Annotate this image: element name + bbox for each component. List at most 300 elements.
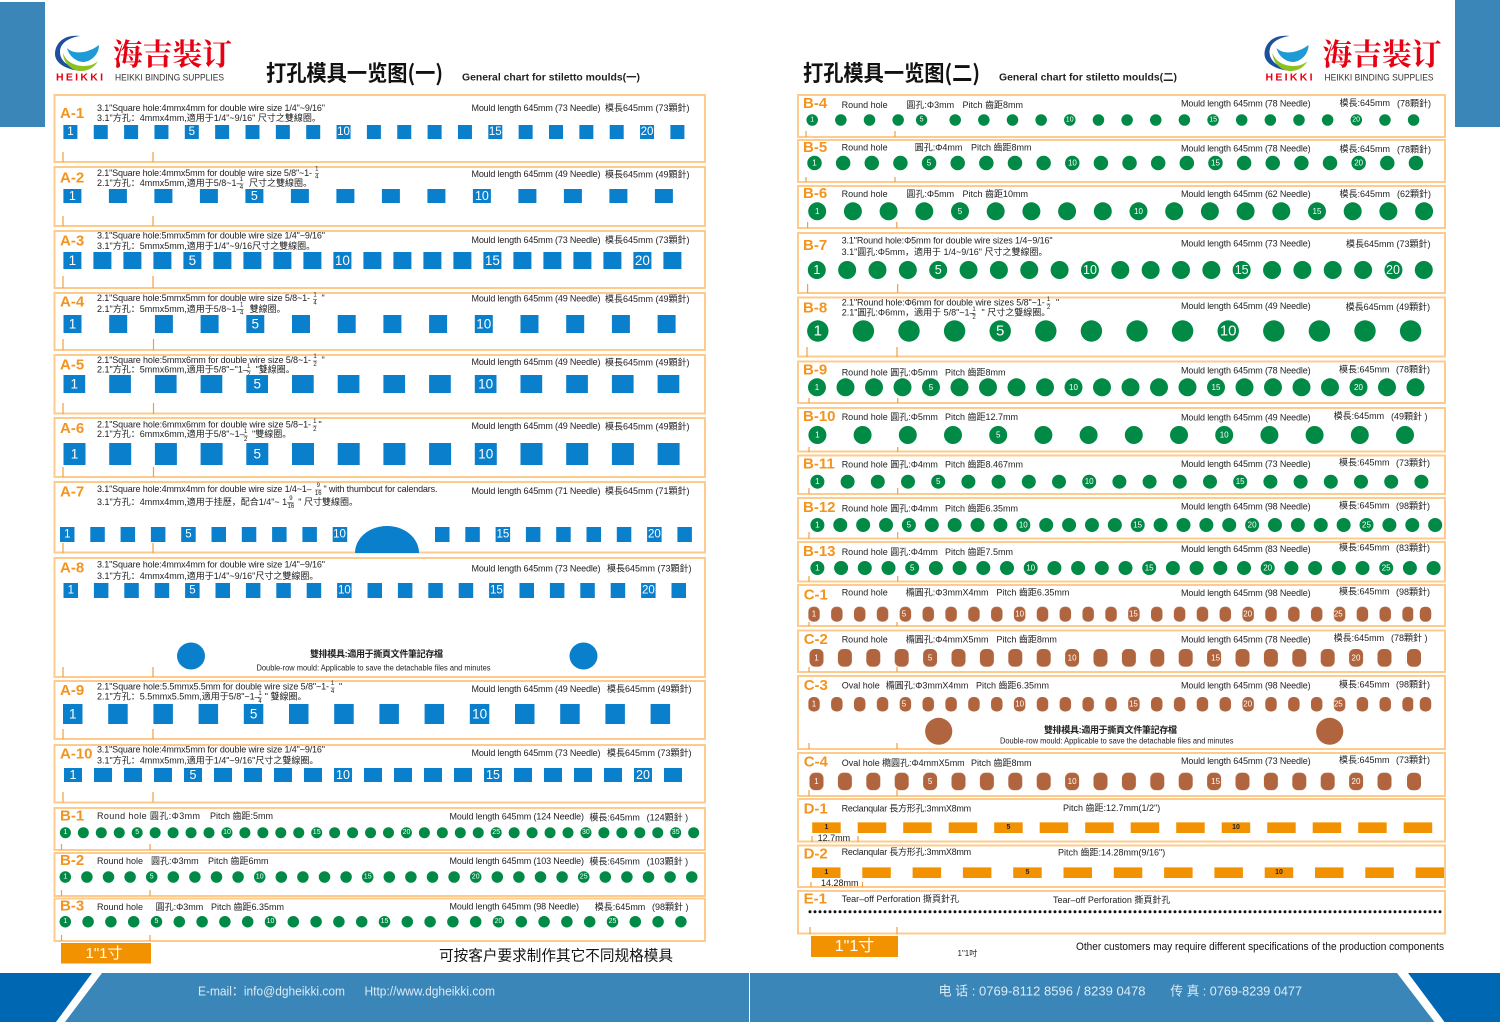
panel: B-10: 5 bbox=[996, 430, 1001, 440]
panel: A-6: 5 bbox=[254, 446, 261, 462]
panel: B-3: 20 bbox=[495, 918, 502, 925]
panel: A-8: 3.1"Square hole:4mmx4mm for double wire size 1/4"~9/16" bbox=[97, 560, 325, 570]
panel: A-9: 10 bbox=[472, 706, 487, 722]
panel: B-9: Round hole 圓孔:Φ5mm bbox=[842, 368, 938, 378]
panel: A-9: A-9 bbox=[60, 682, 84, 699]
panel: A-7: 模長645mm (71顆針) bbox=[605, 485, 690, 496]
double-row note: Double-row mould: Applicable to save the detachable files and minutes bbox=[256, 664, 490, 672]
panel: C-4: Mould length 645mm (73 Needle) bbox=[1181, 756, 1311, 766]
footer: right: 传 真 : 0769-8239 0477 bbox=[1170, 984, 1302, 998]
panel: B-8: 模長645mm (49顆針) bbox=[1346, 301, 1430, 312]
panel: C-4: 20 bbox=[1352, 777, 1361, 786]
panel: B-7: 1 bbox=[813, 263, 820, 277]
panel: C-1: 橢圓孔:Φ3mmX4mm bbox=[906, 587, 988, 598]
panel: B-5: 10 bbox=[1068, 158, 1077, 168]
panel: B-1: 35 bbox=[672, 829, 680, 836]
panel: B-4: Round hole bbox=[842, 100, 888, 110]
panel: B-3: Round hole bbox=[97, 902, 143, 912]
panel: A-8: 3.1"方孔：4mmx4mm,適用于1/4"~9/16"尺寸之雙線圈。 bbox=[97, 570, 318, 581]
panel: B-8: 1 bbox=[972, 307, 976, 313]
panel: B-1: Mould length 645mm (124 Needle) bbox=[450, 812, 584, 822]
panel: B-5: 15 bbox=[1211, 158, 1220, 168]
panel: B-4: (78顆針) bbox=[1397, 98, 1431, 108]
panel: B-7: 模長645mm (73顆針) bbox=[1346, 238, 1431, 249]
panel: B-2: 5 bbox=[150, 874, 154, 880]
panel: B-5: Mould length 645mm (78 Needle) bbox=[1181, 144, 1311, 154]
panel: A-2: 尺寸之雙線圈。 bbox=[249, 177, 312, 188]
panel: B-1: 15 bbox=[313, 829, 321, 836]
panel: B-9: B-9 bbox=[803, 362, 827, 378]
panel: B-12: 5 bbox=[907, 520, 912, 530]
panel: A-8: 模長645mm (73顆針) bbox=[607, 562, 692, 574]
panel: B-6: 1 bbox=[815, 207, 820, 216]
panel: A-7: A-7 bbox=[60, 484, 84, 500]
title: left: 打孔模具一览图(一) bbox=[266, 56, 443, 88]
panel: B-10: B-10 bbox=[803, 408, 836, 425]
panel: C-3: 橢圓孔:Φ3mmX4mm bbox=[886, 679, 968, 690]
panel: B-11: Pitch 齒距8.467mm bbox=[945, 459, 1023, 469]
panel: C-3: 模長:645mm bbox=[1339, 679, 1390, 689]
panel: A-10 bbox=[54, 744, 705, 802]
panel: C-4: 10 bbox=[1068, 777, 1077, 786]
panel: A-6 bbox=[54, 418, 705, 477]
panel: B-2: B-2 bbox=[60, 852, 84, 869]
footer: left bbox=[0, 973, 749, 1022]
panel: D-1: 5 bbox=[1007, 824, 1011, 831]
thumbcut half circle bbox=[355, 526, 419, 553]
panel: B-10 bbox=[798, 408, 1445, 452]
panel: A-7: " 尺寸雙線圈。 bbox=[298, 496, 358, 507]
panel: B-3: B-3 bbox=[60, 898, 84, 914]
panel: A-7 bbox=[54, 482, 705, 553]
panel: B-6: Pitch 齒距10mm bbox=[962, 189, 1028, 199]
panel: A-7: " with thumbcut for calendars. bbox=[324, 484, 438, 494]
panel: A-6: 10 bbox=[478, 446, 493, 462]
panel: B-3: 25 bbox=[609, 918, 616, 925]
panel: A-7: 1 bbox=[64, 528, 71, 540]
panel: D-1: 1 bbox=[825, 824, 829, 831]
panel: A-2: 1 bbox=[69, 189, 76, 203]
panel: A-9: 4 bbox=[258, 699, 262, 705]
panel: B-10: 模長:645mm bbox=[1334, 411, 1384, 421]
panel: B-3: Pitch 齒距6.35mm bbox=[211, 902, 284, 912]
panel: A-6: 模長645mm (49顆針) bbox=[605, 420, 690, 432]
title: right: 打孔模具一览图(二) bbox=[803, 56, 980, 88]
panel: B-11: Round hole 圓孔:Φ4mm bbox=[842, 459, 938, 469]
double-row note: Double-row mould: Applicable to save the detachable files and minutes bbox=[1000, 736, 1234, 746]
panel: D-1: Pitch 齒距:12.7mm(1/2") bbox=[1063, 803, 1160, 813]
panel: A-3: 15 bbox=[485, 253, 500, 268]
panel: C-2: 1 bbox=[814, 653, 819, 662]
panel: E-1: Tear–off Perforation 撕頁針孔 bbox=[1053, 894, 1170, 905]
panel: B-13: 20 bbox=[1263, 564, 1273, 572]
panel: B-1: 1 bbox=[63, 829, 67, 836]
panel: B-3: 10 bbox=[267, 918, 274, 925]
panel: B-1: 5 bbox=[135, 829, 139, 836]
panel: B-8: 2.1"Round hole:Φ6mm for double wire sizes 5/8"~1- bbox=[842, 298, 1045, 308]
panel: E-1: Tear–off Perforation 撕頁針孔 bbox=[842, 893, 959, 904]
panel: A-8 bbox=[54, 558, 705, 677]
panel: B-5: Round hole bbox=[842, 142, 888, 152]
panel: A-2: Mould length 645mm (49 Needle) bbox=[472, 169, 600, 179]
panel: A-9: 1 bbox=[69, 706, 77, 722]
panel: A-1: 5 bbox=[189, 126, 195, 138]
panel: A-7: Mould length 645mm (71 Needle) bbox=[472, 486, 600, 496]
panel: C-2: 模長:645mm bbox=[1334, 633, 1384, 643]
panel: B-9: 1 bbox=[815, 383, 820, 392]
panel: A-8: A-8 bbox=[60, 560, 84, 576]
panel: A-6: 1 bbox=[244, 429, 248, 435]
panel: A-5: 10 bbox=[478, 376, 493, 392]
panel: B-4: 10 bbox=[1066, 116, 1074, 124]
panel: B-11: 1 bbox=[815, 477, 820, 486]
panel: C-4: 橢圓孔:Φ4mmX5mm bbox=[882, 757, 965, 768]
panel: A-9: 4 bbox=[331, 689, 335, 695]
panel: B-12: B-12 bbox=[803, 499, 836, 516]
panel: C-3: C-3 bbox=[804, 677, 828, 694]
panel: B-11: Mould length 645mm (73 Needle) bbox=[1181, 459, 1311, 469]
panel: B-11: B-11 bbox=[803, 456, 835, 472]
panel: A-1: 1 bbox=[67, 126, 74, 138]
footer: right bbox=[750, 973, 1500, 1022]
panel: B-12: 1 bbox=[815, 520, 820, 530]
panel: C-3: 25 bbox=[1334, 700, 1343, 709]
subtitle: right: General chart for stiletto moulds(二) bbox=[999, 72, 1177, 84]
panel: C-4: (73顆針) bbox=[1396, 754, 1430, 765]
panel: B-11: 模長:645mm bbox=[1339, 458, 1390, 468]
panel: A-9: 模長645mm (49顆針) bbox=[607, 683, 692, 694]
panel: A-4: Mould length 645mm (49 Needle) bbox=[472, 294, 600, 304]
panel: C-3 bbox=[798, 676, 1445, 749]
panel: B-7: 3.1"Round hole:Φ5mm for double wire sizes 1/4~9/16" bbox=[842, 236, 1053, 246]
panel: B-4: 模長:645mm bbox=[1340, 98, 1390, 108]
panel: A-7: 16 bbox=[288, 504, 295, 510]
panel: A-2: 10 bbox=[475, 189, 489, 203]
panel: B-5 bbox=[798, 139, 1445, 182]
panel: B-1: B-1 bbox=[60, 808, 84, 824]
panel: D-2: Reclanqular 長方形孔:3mmX8mm bbox=[842, 846, 971, 857]
panel: A-3: Mould length 645mm (73 Needle) bbox=[472, 235, 600, 245]
panel: A-1: Mould length 645mm (73 Needle) bbox=[472, 103, 600, 113]
panel: B-1: 10 bbox=[223, 829, 231, 836]
panel: B-5: 20 bbox=[1354, 158, 1364, 168]
panel: B-4: 20 bbox=[1352, 116, 1360, 124]
panel: A-1: 3.1"Square hole:4mmx4mm for double wire size 1/4"~9/16" bbox=[97, 103, 325, 113]
panel: B-6: 15 bbox=[1313, 207, 1322, 216]
panel: A-3: 3.1"方孔：5mmx5mm,適用于1/4"~9/16尺寸之雙線圈。 bbox=[97, 240, 315, 251]
footer: left: E-mail：info@dgheikki.com bbox=[198, 984, 345, 998]
double-row note: 雙排模具:適用于撕頁文件筆記存檔 bbox=[310, 648, 443, 659]
panel: A-6: Mould length 645mm (49 Needle) bbox=[472, 421, 600, 431]
panel: C-3: 5 bbox=[902, 700, 907, 709]
panel: D-2: Pitch 齒距:14.28mm(9/16") bbox=[1058, 848, 1165, 858]
panel: D-2 bbox=[798, 846, 1445, 888]
panel: C-4 bbox=[798, 753, 1445, 796]
panel: C-2: 橢圓孔:Φ4mmX5mm bbox=[906, 634, 988, 645]
panel: B-2: 10 bbox=[256, 874, 264, 880]
panel: A-9: Mould length 645mm (49 Needle) bbox=[472, 684, 600, 694]
logo: left bbox=[55, 30, 232, 84]
panel: C-1: C-1 bbox=[804, 586, 828, 604]
panel: B-13: 1 bbox=[815, 564, 820, 572]
panel: A-3: 1 bbox=[69, 253, 76, 268]
panel: B-6: 5 bbox=[958, 207, 963, 216]
panel: A-6: "雙線圈。 bbox=[252, 428, 291, 439]
panel: B-1 bbox=[54, 808, 705, 850]
panel: B-7: 15 bbox=[1235, 263, 1249, 277]
logo: right: 海吉装订 bbox=[1322, 30, 1442, 74]
panel: A-3: 模長645mm (73顆針) bbox=[605, 234, 690, 245]
panel: B-5: 模長:645mm bbox=[1340, 144, 1390, 154]
panel: A-1: A-1 bbox=[60, 105, 84, 122]
panel: A-9: 1 bbox=[331, 681, 335, 687]
scale bar: left: 1"1寸 bbox=[85, 945, 123, 962]
logo: right bbox=[1264, 30, 1442, 84]
panel: B-6 bbox=[798, 185, 1445, 228]
panel: A-5: 1 bbox=[313, 354, 317, 360]
panel: C-3: 10 bbox=[1015, 700, 1025, 709]
panel: B-11: (73顆針) bbox=[1396, 457, 1430, 468]
panel: C-1: 模長:645mm bbox=[1339, 587, 1390, 597]
panel: A-6: 2 bbox=[313, 427, 317, 433]
panel: A-8: 15 bbox=[490, 584, 503, 596]
panel: B-5: 圓孔:Φ4mm bbox=[915, 142, 962, 152]
panel: A-10: 5 bbox=[190, 768, 197, 782]
panel: C-2: 5 bbox=[928, 653, 933, 662]
panel: B-11: 10 bbox=[1085, 477, 1094, 486]
panel: B-4: 1 bbox=[810, 116, 814, 124]
panel: B-5: (78顆針) bbox=[1397, 144, 1431, 154]
panel: A-5: 2 bbox=[313, 362, 317, 368]
panel: C-1: Mould length 645mm (98 Needle) bbox=[1181, 588, 1311, 598]
panel: A-2: A-2 bbox=[60, 170, 84, 186]
panel: A-7: 3.1"方孔：4mmx4mm,適用于挂歷，配合1/4"~ 1– bbox=[97, 496, 292, 507]
panel: B-3: 1 bbox=[63, 918, 67, 925]
panel: A-1 bbox=[54, 95, 705, 162]
panel: B-12: 10 bbox=[1019, 520, 1028, 530]
panel: B-9: 10 bbox=[1069, 383, 1078, 392]
panel: B-8: 2.1"圓孔:Φ6mm，適用于 5/8"~1– bbox=[842, 306, 975, 318]
panel: C-1: 5 bbox=[902, 610, 907, 619]
panel: A-5: 1 bbox=[71, 376, 78, 392]
panel: B-12: 25 bbox=[1362, 520, 1371, 530]
panel: C-2 bbox=[798, 630, 1445, 672]
panel: C-2: 10 bbox=[1068, 653, 1077, 662]
panel: A-8: 20 bbox=[642, 584, 655, 596]
panel: C-3: Oval hole bbox=[842, 680, 880, 690]
panel: C-3: 1 bbox=[812, 700, 817, 709]
panel: B-6: (62顆針) bbox=[1397, 188, 1431, 199]
panel: C-4: 模長:645mm bbox=[1339, 755, 1390, 765]
panel: B-3: 5 bbox=[155, 918, 159, 925]
panel: A-5: 1 bbox=[247, 364, 251, 370]
panel: B-1: Round hole 圓孔:Φ3mm bbox=[97, 811, 200, 821]
panel: A-6: A-6 bbox=[60, 420, 84, 437]
panel: B-2: 15 bbox=[364, 874, 372, 880]
logo: left: 海吉装订 bbox=[113, 30, 232, 74]
panel: B-3 bbox=[54, 898, 705, 941]
panel: B-10: 10 bbox=[1220, 430, 1229, 440]
panel: A-6: 2.1"方孔：6mmx6mm,適用于5/8"~1– bbox=[97, 428, 245, 439]
double-row circles bbox=[177, 642, 598, 670]
panel: B-2: Round hole bbox=[97, 856, 143, 866]
panel: B-11: 5 bbox=[936, 477, 941, 486]
panel: B-8: Mould length 645mm (49 Needle) bbox=[1181, 301, 1311, 311]
panel: B-12 bbox=[798, 498, 1445, 538]
panel: B-4: 圓孔:Φ3mm bbox=[906, 100, 954, 110]
panel: B-2: Pitch 齒距6mm bbox=[208, 856, 269, 866]
panel: A-2: 5 bbox=[251, 189, 258, 203]
logo: right: HEIKKI BINDING SUPPLIES bbox=[1324, 72, 1434, 82]
panel: B-7: 3.1"圓孔:Φ5mm，適用于 1/4~9/16" 尺寸之雙線圈。 bbox=[842, 246, 1047, 257]
panel: C-3: Mould length 645mm (98 Needle) bbox=[1181, 680, 1311, 690]
panel: B-9: (78顆針) bbox=[1396, 364, 1430, 374]
panel: B-2: 25 bbox=[580, 874, 588, 880]
panel: B-2: 1 bbox=[63, 874, 67, 880]
panel: B-4: 5 bbox=[920, 116, 924, 124]
panel: A-7: 20 bbox=[648, 528, 661, 540]
top-right blue block bbox=[1455, 0, 1500, 127]
panel: B-8: " 尺寸之雙線圈。 bbox=[982, 306, 1050, 318]
panel: C-1: 15 bbox=[1129, 610, 1138, 619]
panel: C-3: Pitch 齒距6.35mm bbox=[976, 680, 1049, 690]
double-row note bbox=[256, 648, 490, 672]
panel: B-6: Mould length 645mm (62 Needle) bbox=[1181, 189, 1311, 199]
panel: A-4 bbox=[54, 292, 705, 350]
panel: A-4: 1 bbox=[313, 292, 317, 298]
panel: A-10: 20 bbox=[636, 768, 650, 782]
subtitle: left: General chart for stiletto moulds(一) bbox=[462, 72, 640, 84]
panel: C-1: 20 bbox=[1243, 610, 1253, 619]
panel: B-2: 圓孔:Φ3mm bbox=[151, 856, 199, 866]
panel: B-8: B-8 bbox=[803, 300, 827, 316]
panel: A-4: 模長645mm (49顆針) bbox=[605, 293, 690, 304]
panel: B-4: 15 bbox=[1209, 116, 1217, 124]
footer: right: 电 话 : 0769-8112 8596 / 8239 0478 bbox=[938, 984, 1146, 998]
panel: B-5: 1 bbox=[812, 158, 817, 168]
panel: A-2: 4 bbox=[315, 174, 319, 180]
panel: A-2: 2.1"方孔：4mmx5mm,適用于5/8~1– bbox=[97, 177, 241, 188]
panel: A-7: 15 bbox=[497, 528, 509, 540]
panel: B-8: 5 bbox=[996, 322, 1004, 340]
panel: A-7: 16 bbox=[315, 491, 322, 497]
panel: B-13: 5 bbox=[910, 564, 915, 572]
panel: A-2: 模長645mm (49顆針) bbox=[605, 168, 690, 180]
panel: A-1: 15 bbox=[489, 126, 502, 138]
panel: B-10: Round hole 圓孔:Φ5mm bbox=[842, 412, 938, 422]
panel: B-10: Pitch 齒距12.7mm bbox=[945, 412, 1018, 422]
panel: C-4: Oval hole bbox=[842, 758, 880, 768]
panel: A-5: " bbox=[322, 355, 325, 365]
panel: A-10: 10 bbox=[336, 768, 350, 782]
panel: B-2 bbox=[54, 852, 705, 896]
panel: C-2: C-2 bbox=[804, 631, 828, 648]
panel: B-12: 20 bbox=[1248, 520, 1257, 530]
panel: B-8: 2 bbox=[1047, 305, 1051, 311]
note: left: 可按客户要求制作其它不同规格模具 bbox=[439, 944, 673, 966]
scale bar: right bbox=[811, 936, 898, 957]
panel: A-2: 1 bbox=[315, 166, 319, 172]
panel: A-4: 雙線圈。 bbox=[250, 303, 286, 314]
panel: A-5: 2 bbox=[247, 372, 251, 378]
panel: B-13: Round hole 圓孔:Φ4mm bbox=[842, 547, 938, 557]
panel: B-3: Mould length 645mm (98 Needle) bbox=[450, 902, 579, 912]
logo: left: HEIKKI bbox=[56, 72, 103, 84]
panel: A-10: 15 bbox=[486, 768, 500, 782]
panel: B-1: 模長:645mm bbox=[589, 812, 640, 822]
panel: B-3: 圓孔:Φ3mm bbox=[156, 902, 203, 912]
double-row note: 雙排模具:適用于撕頁文件筆記存檔 bbox=[1044, 724, 1177, 735]
panel: C-3: 20 bbox=[1243, 700, 1253, 709]
panel: A-4: 2.1"Square hole:5mmx5mm for double wire size 5/8~1- bbox=[97, 293, 310, 303]
panel: A-9: 5 bbox=[250, 706, 257, 722]
panel: A-9: " 雙線圈。 bbox=[265, 690, 307, 702]
panel: B-1: (124顆針 ) bbox=[647, 812, 688, 822]
panel: A-10: 3.1"Square hole:4mmx5mm for double wire size 1/4"~9/16" bbox=[97, 744, 325, 754]
panel: A-1: 10 bbox=[337, 126, 350, 138]
panel: B-12: 模長:645mm bbox=[1339, 501, 1390, 511]
panel: A-7: 10 bbox=[333, 528, 346, 540]
panel: A-6: 1 bbox=[71, 446, 78, 462]
panel: A-2: 4 bbox=[240, 185, 244, 191]
panel: B-13: 15 bbox=[1145, 564, 1154, 572]
panel: A-8: Mould length 645mm (73 Needle) bbox=[472, 564, 600, 574]
panel: B-9: 模長:645mm bbox=[1339, 364, 1390, 374]
panel: D-1: 10 bbox=[1232, 824, 1240, 831]
panel: B-3: 模長:645mm bbox=[595, 902, 645, 912]
panel: C-4: Pitch 齒距8mm bbox=[971, 758, 1032, 768]
panel: E-1 bbox=[798, 890, 1445, 934]
panel: B-2: (103顆針 ) bbox=[647, 856, 688, 866]
panel: C-1 bbox=[798, 585, 1445, 626]
panel: A-5: 模長645mm (49顆針) bbox=[605, 356, 690, 368]
panel: B-6: 圓孔:Φ5mm bbox=[906, 189, 954, 199]
panel: B-13: B-13 bbox=[803, 543, 836, 560]
panel: A-10: 3.1"方孔：4mmx5mm,適用于1/4"~9/16"尺寸之雙線圈。 bbox=[97, 754, 318, 766]
panel: B-12: Mould length 645mm (98 Needle) bbox=[1181, 502, 1311, 512]
footer: left: Http://www.dgheikki.com bbox=[364, 984, 495, 998]
panel: A-7: 9 bbox=[317, 483, 321, 489]
panel: A-9: 2.1"方孔：5.5mmx5.5mm,適用于5/8"~1– bbox=[97, 690, 260, 702]
panel: D-2: 10 bbox=[1275, 869, 1283, 876]
panel: B-3: (98顆針 ) bbox=[652, 901, 689, 912]
panel: C-4: 1 bbox=[814, 777, 819, 786]
panel: A-3: 20 bbox=[635, 253, 650, 268]
panel: D-2: D-2 bbox=[804, 846, 828, 862]
panel: C-2: Round hole bbox=[842, 635, 888, 645]
panel: B-4: Pitch 齒距8mm bbox=[962, 100, 1023, 110]
panel: A-3: 3.1"Square hole:5mmx5mm for double wire size 1/4"~9/16" bbox=[97, 230, 325, 240]
panel: B-4: B-4 bbox=[803, 95, 828, 112]
panel: D-1 bbox=[798, 799, 1445, 843]
panel: A-9: 1 bbox=[258, 691, 262, 697]
panel: B-6: 模長:645mm bbox=[1340, 189, 1390, 199]
small scale note: 1"1吋 bbox=[958, 948, 977, 958]
panel: A-4: 4 bbox=[240, 310, 244, 316]
panel: A-2: 2.1"Square hole:4mmx5mm for double wire size 5/8"~1- bbox=[97, 168, 312, 178]
scale bar: right: 1"1寸 bbox=[835, 937, 874, 955]
panel: A-1: 3.1"方孔：4mmx4mm,適用于1/4"~9/16" 尺寸之雙線圈。 bbox=[97, 112, 321, 123]
panel: A-5: 2.1"Square hole:5mmx6mm for double wire size 5/8~1- bbox=[97, 355, 311, 365]
panel: A-8: 1 bbox=[68, 584, 74, 596]
panel: B-7: 20 bbox=[1386, 263, 1400, 277]
panel: C-1: 10 bbox=[1015, 610, 1025, 619]
panel: C-1: 25 bbox=[1334, 610, 1343, 619]
panel: C-4: 15 bbox=[1211, 777, 1221, 786]
panel: A-7: 5 bbox=[185, 528, 192, 540]
panel: B-12: Pitch 齒距6.35mm bbox=[945, 503, 1018, 513]
panel: A-4: 10 bbox=[476, 316, 491, 332]
